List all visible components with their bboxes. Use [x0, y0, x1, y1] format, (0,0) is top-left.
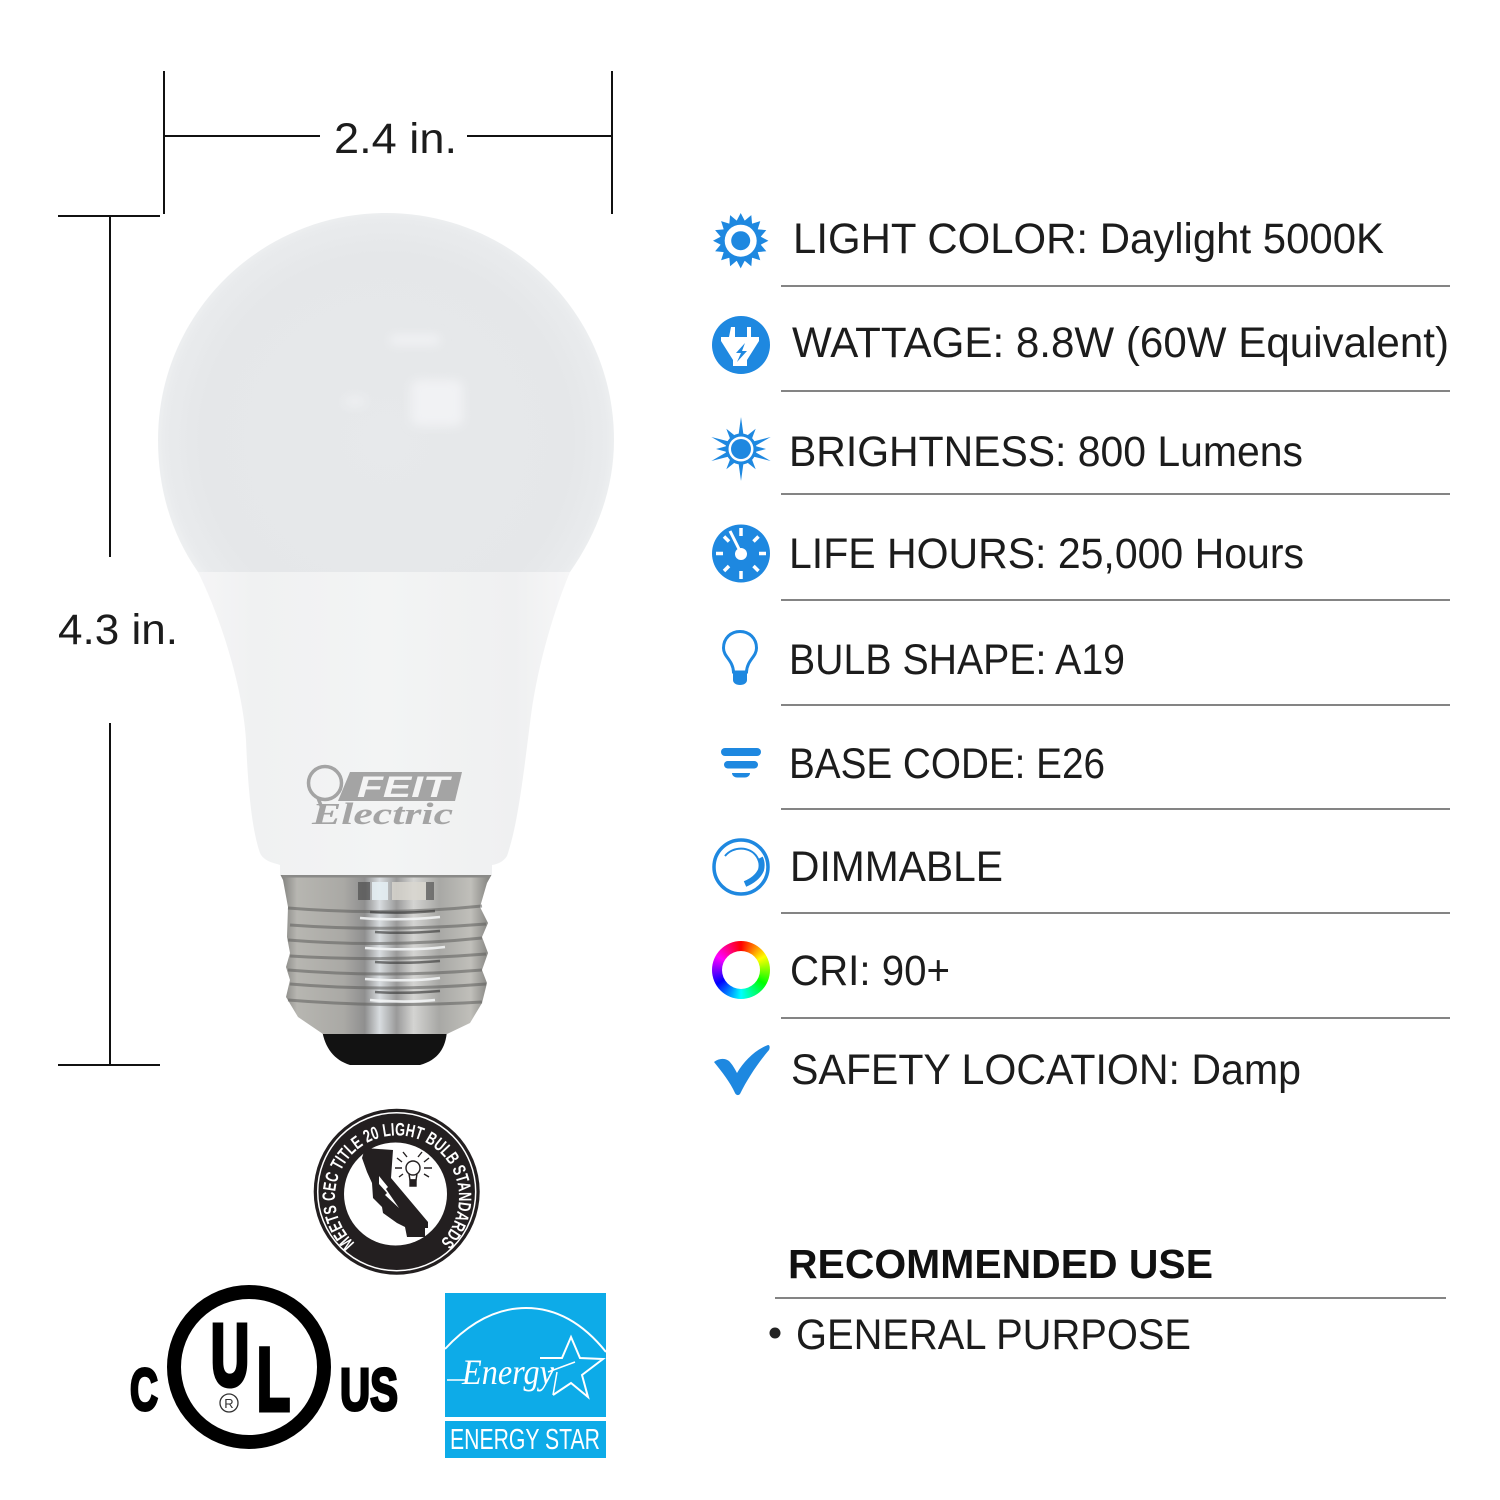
UL certification mark: L: [257, 1329, 290, 1429]
icon: dimmer ring: [714, 840, 768, 894]
spec row: brightness: BRIGHTNESS: 800 Lumens: [789, 428, 1303, 476]
Feit Electric logo: Electric: [311, 796, 453, 831]
spec row: wattage: WATTAGE: 8.8W (60W Equivalent): [792, 319, 1449, 367]
light bulb illustration: [158, 213, 614, 1065]
bulb neck housing: [198, 572, 570, 875]
icon: bright sun: [710, 417, 772, 481]
spec row: life hours: [712, 524, 1450, 600]
Feit Electric logo: FEIT: [357, 771, 453, 804]
spec row: life hours: LIFE HOURS: 25,000 Hours: [789, 530, 1304, 578]
Energy Star logo: ENERGY STAR: [450, 1424, 600, 1456]
icon: gauge clock: [712, 524, 770, 582]
spec row: light color: LIGHT COLOR: Daylight 5000K: [793, 215, 1384, 263]
spec row: bulb shape: BULB SHAPE: A19: [789, 636, 1125, 684]
UL certification mark: U: [211, 1307, 249, 1404]
bulb globe: [158, 213, 614, 572]
spec row: wattage: [712, 316, 1450, 391]
globe highlights: [345, 335, 463, 426]
spec row: base code: [721, 740, 1450, 809]
icon: bulb outline: [724, 632, 756, 685]
spec row: dimmable: [714, 840, 1450, 913]
use list item: GENERAL PURPOSE: [796, 1311, 1191, 1359]
UL certification mark: US: [340, 1357, 398, 1423]
bulb base: [280, 874, 492, 1065]
heading: RECOMMENDED USE: [788, 1241, 1213, 1287]
spec row: bulb shape: [724, 632, 1450, 705]
icon: California map: [362, 1148, 428, 1237]
spec row: safety location: SAFETY LOCATION: Damp: [791, 1046, 1301, 1094]
spec row: brightness: [710, 417, 1450, 494]
icon: base stack: [721, 748, 761, 778]
recommended use panel: [770, 1241, 1446, 1359]
spec row: CRI: CRI: 90+: [790, 947, 950, 995]
spec row: CRI: [712, 941, 1450, 1018]
icon: small bulb with rays: [395, 1152, 432, 1186]
icon: colour wheel: [712, 941, 770, 999]
Energy Star logo: Energy: [461, 1352, 554, 1392]
CEC Title 20 badge: MEETS CEC TITLE 20 LIGHT BULB STANDARDS: [322, 1122, 472, 1251]
icon: sun: [713, 213, 768, 268]
UL certification mark: C: [130, 1357, 158, 1423]
spec row: base code: BASE CODE: E26: [789, 740, 1105, 788]
Feit Electric logo: [308, 766, 462, 831]
icon: check mark: [714, 1045, 770, 1095]
width dimension: 2.4 in.: 2.4 in.: [334, 115, 457, 163]
Energy Star logo: [445, 1293, 606, 1458]
icon: plug: [712, 316, 770, 374]
spec row: light color: [713, 213, 1450, 286]
UL certification mark: R: [224, 1396, 234, 1411]
height dimension: 4.3 in.: 4.3 in.: [58, 606, 178, 654]
UL certification mark: [130, 1292, 398, 1442]
spec row: dimmable: DIMMABLE: [790, 843, 1003, 891]
